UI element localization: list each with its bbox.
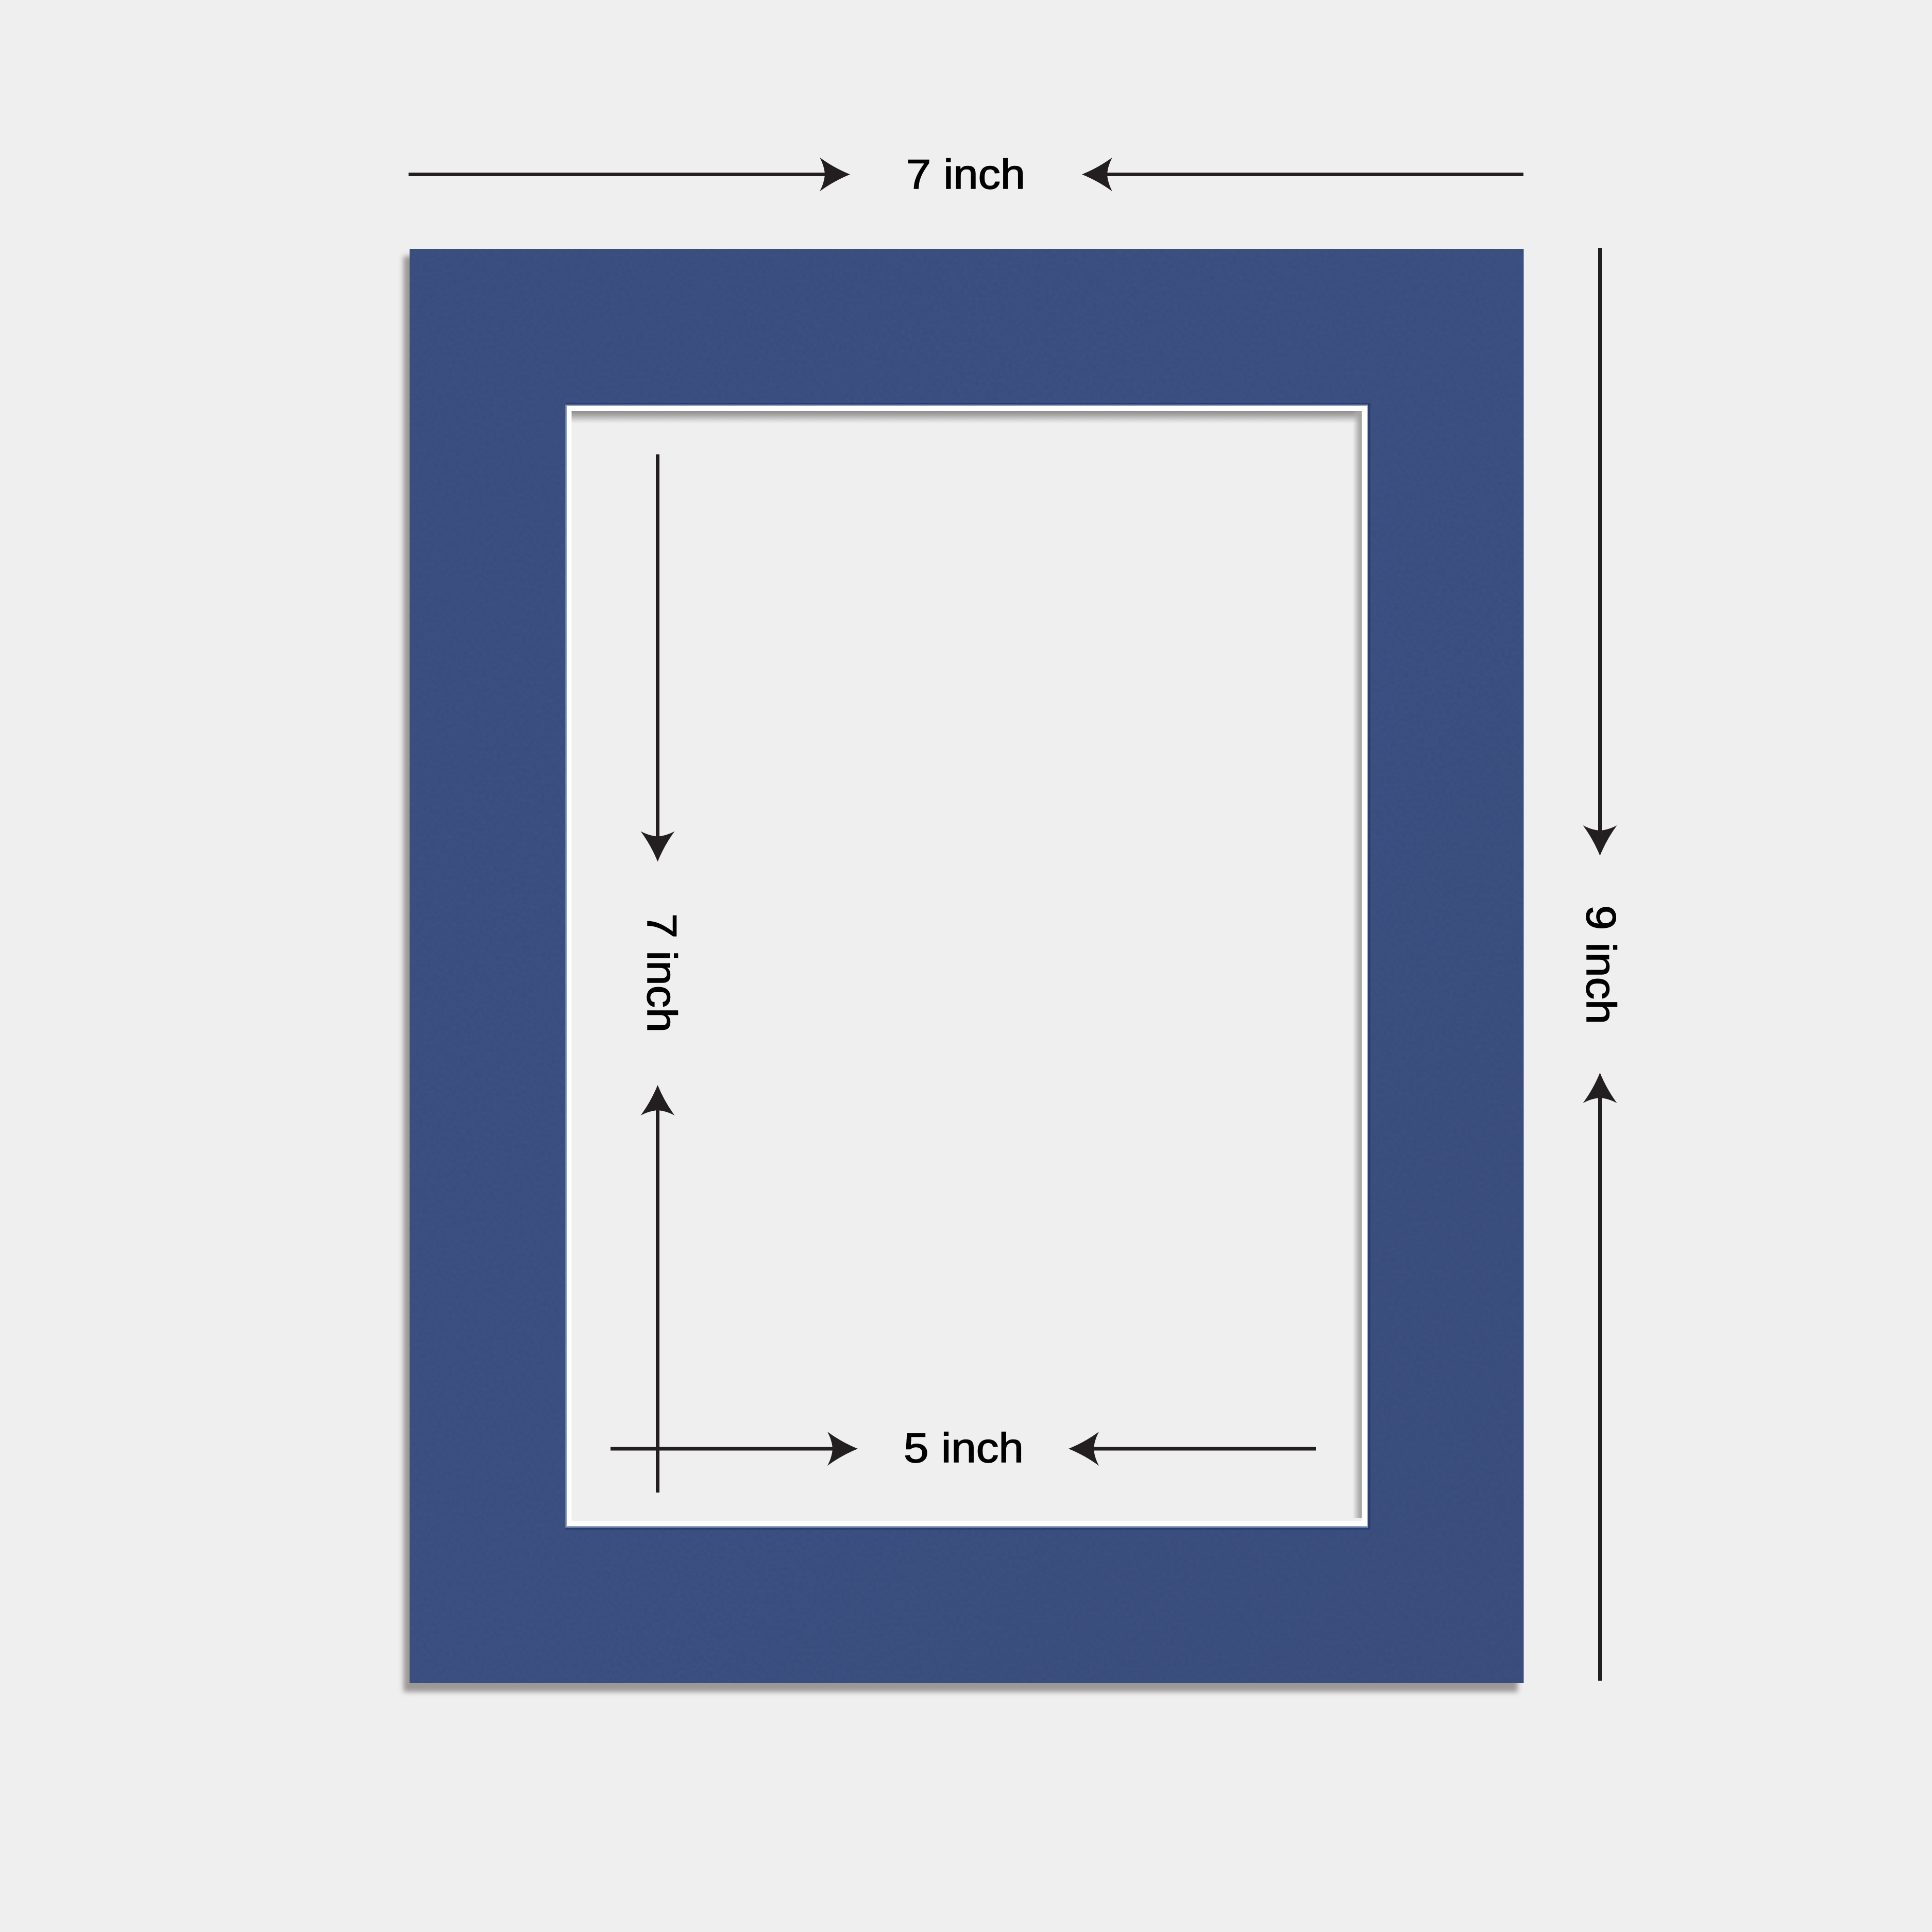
label: outer height 9 inch: 9 inch bbox=[1578, 905, 1624, 1024]
window opening with bevel bbox=[566, 403, 1370, 1530]
label: window width 5 inch: 5 inch bbox=[904, 1425, 1024, 1471]
arrow: window height, pointing up bbox=[641, 1085, 675, 1493]
arrow: window height, pointing down bbox=[641, 454, 675, 861]
arrow: window width, pointing left bbox=[1069, 1432, 1316, 1466]
arrow: outer height, pointing up bbox=[1583, 1073, 1617, 1681]
panel: blue mat board bbox=[403, 249, 1524, 1692]
paper texture bbox=[410, 249, 1524, 1683]
arrow: outer height, pointing down bbox=[1583, 248, 1617, 856]
mat board drop shadow bbox=[403, 256, 1518, 1692]
label: window height 7 inch: 7 inch bbox=[638, 913, 685, 1032]
label: outer width 7 inch: 7 inch bbox=[906, 151, 1025, 198]
arrow: window width, pointing right bbox=[611, 1432, 858, 1466]
mat board surface bbox=[410, 249, 1524, 1683]
arrow: top width, pointing left bbox=[1082, 158, 1523, 192]
arrow: top width, pointing right bbox=[409, 158, 850, 192]
